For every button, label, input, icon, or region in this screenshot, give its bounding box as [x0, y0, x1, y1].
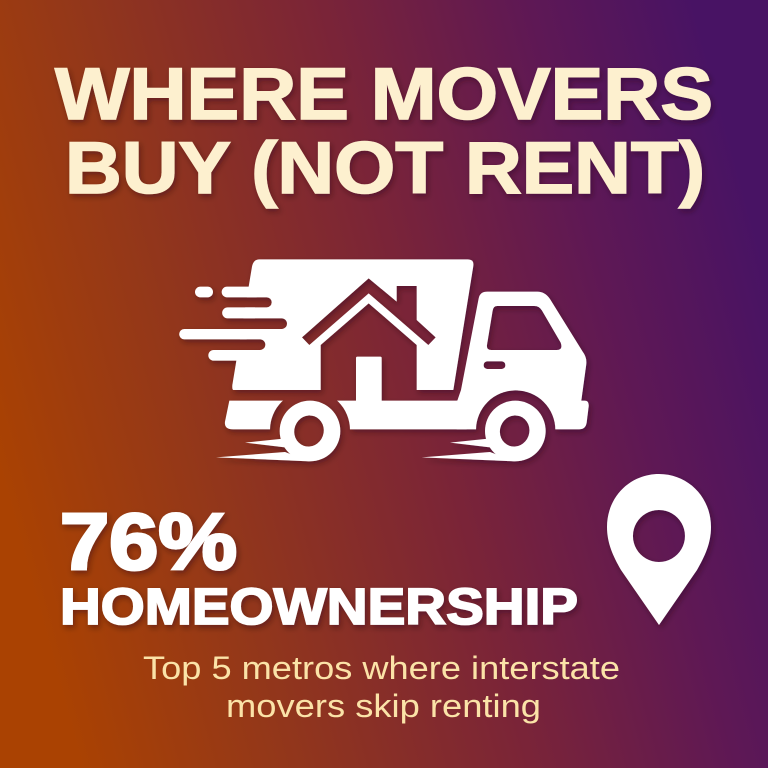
icon: moving truck with house: [179, 259, 592, 467]
title: [55, 54, 713, 209]
subtitle: [143, 650, 620, 724]
subtitle line 1: Top 5 metros where interstate: [143, 650, 620, 686]
subtitle line 2: movers skip renting: [226, 688, 541, 724]
title line 1: WHERE MOVERS: [55, 54, 713, 135]
statistic: 76%: 76%: [60, 497, 237, 586]
label: homeownership: HOMEOWNERSHIP: [60, 578, 578, 635]
icon: location pin: [607, 474, 711, 625]
title line 2: BUY (NOT RENT): [65, 128, 705, 209]
